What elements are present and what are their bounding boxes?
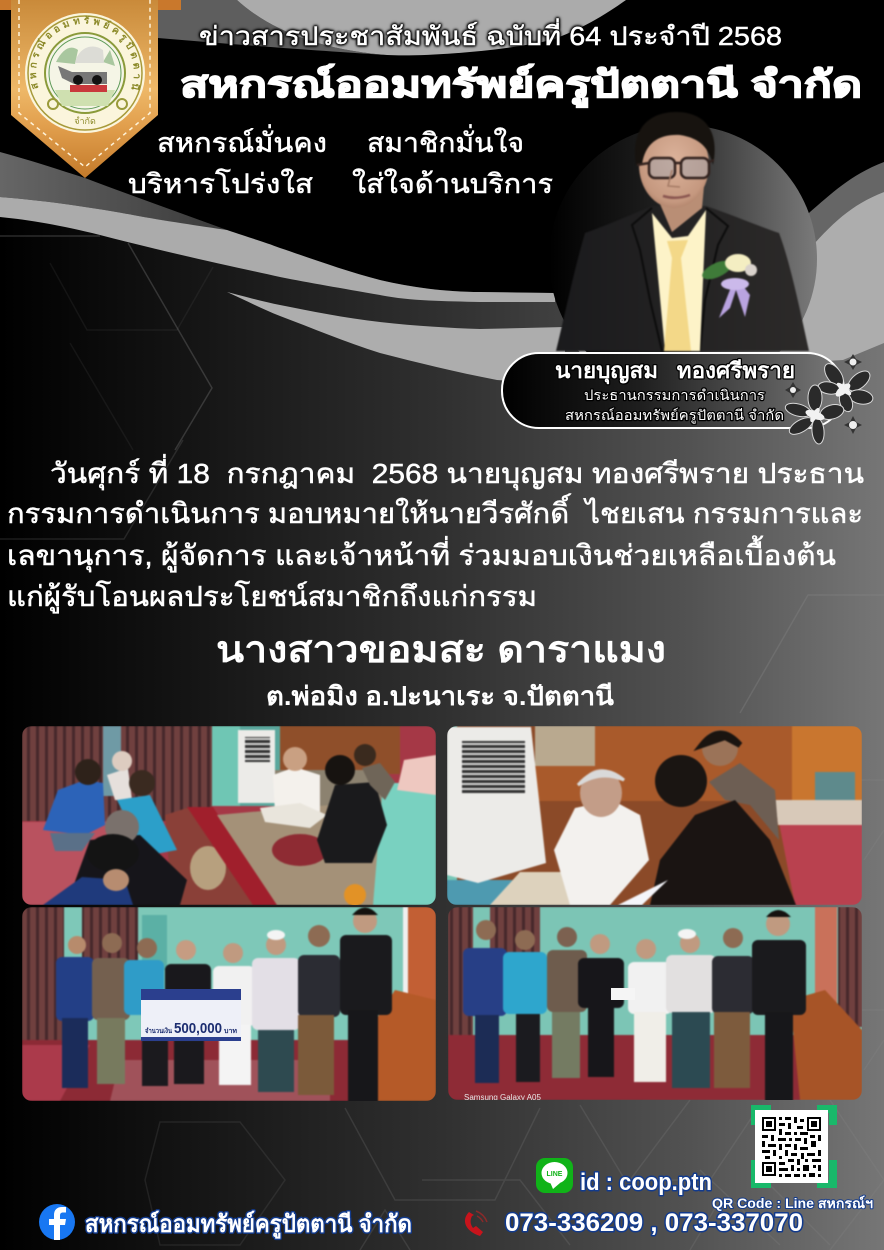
address: ต.พ่อมิง อ.ปะนาเระ จ.ปัตตานี — [266, 681, 614, 711]
seal — [25, 13, 145, 133]
body paragraph: เลขานุการ, ผู้จัดการ และเจ้าหน้าที่ ร่วมมอบเงินช่วยเหลือเบื้องต้น — [7, 535, 836, 573]
group of eight — [56, 908, 392, 1102]
body paragraph: วันศุกร์ ที่ 18 กรกฎาคม 2568 นายบุญสม ทองศรีพราย ประธาน — [50, 454, 864, 491]
watermark: Samsung Galaxy A05 — [464, 1093, 541, 1102]
icon: phone — [465, 1211, 487, 1236]
name plate — [502, 353, 844, 428]
man in white shirt — [554, 800, 649, 905]
name plate: นายบุญสม ทองศรีพราย — [555, 358, 795, 385]
portrait circle — [549, 125, 817, 393]
top waves — [0, 0, 884, 385]
photo 1: seated meeting — [22, 726, 436, 906]
newsletter line: ข่าวสารประชาสัมพันธ์ ฉบับที่ 64 ประจำปี 2568 — [199, 18, 782, 51]
tie — [664, 240, 691, 351]
hair — [635, 112, 715, 165]
slogans — [128, 124, 553, 199]
neck and head — [654, 186, 704, 232]
group of eight — [463, 910, 806, 1102]
QR code — [751, 1105, 837, 1188]
body paragraph — [7, 454, 864, 614]
icon: LINE: LINE — [547, 1171, 563, 1178]
Facebook page name: สหกรณ์ออมทรัพย์ครูปัตตานี จำกัด — [85, 1210, 412, 1239]
LINE id: id : coop.ptn — [580, 1169, 712, 1196]
cheque board: 500,000 — [174, 1020, 222, 1037]
icon: Facebook — [39, 1204, 75, 1240]
seal: สหกรณ์ออมทรัพย์ครูปัตตานี — [30, 16, 140, 90]
corsage — [700, 254, 757, 318]
photo 4: group with envelope — [448, 907, 862, 1102]
body paragraph: แก่ผู้รับโอนผลประโยชน์สมาชิกถึงแก่กรรม — [7, 580, 537, 614]
photo 3: group with cheque board — [22, 907, 436, 1102]
photo 2: document signing close-up — [447, 726, 862, 905]
cheque board: บาท — [224, 1028, 237, 1035]
cheque board: จำนวนเงิน — [145, 1027, 172, 1035]
suit jacket — [556, 206, 809, 351]
slogans: สมาชิกมั่นใจ — [367, 124, 524, 158]
phone numbers: 073-336209 , 073-337070 — [505, 1209, 803, 1237]
portrait: president — [556, 112, 809, 351]
title: สหกรณ์ออมทรัพย์ครูปัตตานี จำกัด — [180, 64, 862, 108]
name plate: ประธานกรรมการดำเนินการ — [584, 387, 765, 403]
name plate: สหกรณ์ออมทรัพย์ครูปัตตานี จำกัด — [565, 407, 784, 424]
cheque board — [141, 989, 241, 1041]
slogans: บริหารโปร่งใส — [128, 168, 313, 199]
body paragraph: กรรมการดำเนินการ มอบหมายให้นายวีรศักดิ์ ไชยเสน กรรมการและ — [7, 493, 863, 529]
logo ribbon — [0, 0, 181, 178]
slogans: สหกรณ์มั่นคง — [157, 124, 327, 158]
shirt — [652, 210, 706, 351]
deceased member name: นางสาวขอมสะ ดาราแมง — [216, 629, 666, 670]
envelope — [611, 988, 629, 1000]
seal: จำกัด — [74, 116, 96, 126]
QR caption: QR Code : Line สหกรณ์ฯ — [712, 1195, 873, 1211]
man in black jacket — [650, 800, 796, 905]
icon: LINE — [536, 1158, 573, 1193]
slogans: ใส่ใจด้านบริการ — [352, 168, 553, 199]
icon: flowers — [784, 354, 874, 444]
seated people — [43, 744, 395, 906]
man in batik — [709, 763, 779, 840]
glasses — [637, 158, 714, 178]
